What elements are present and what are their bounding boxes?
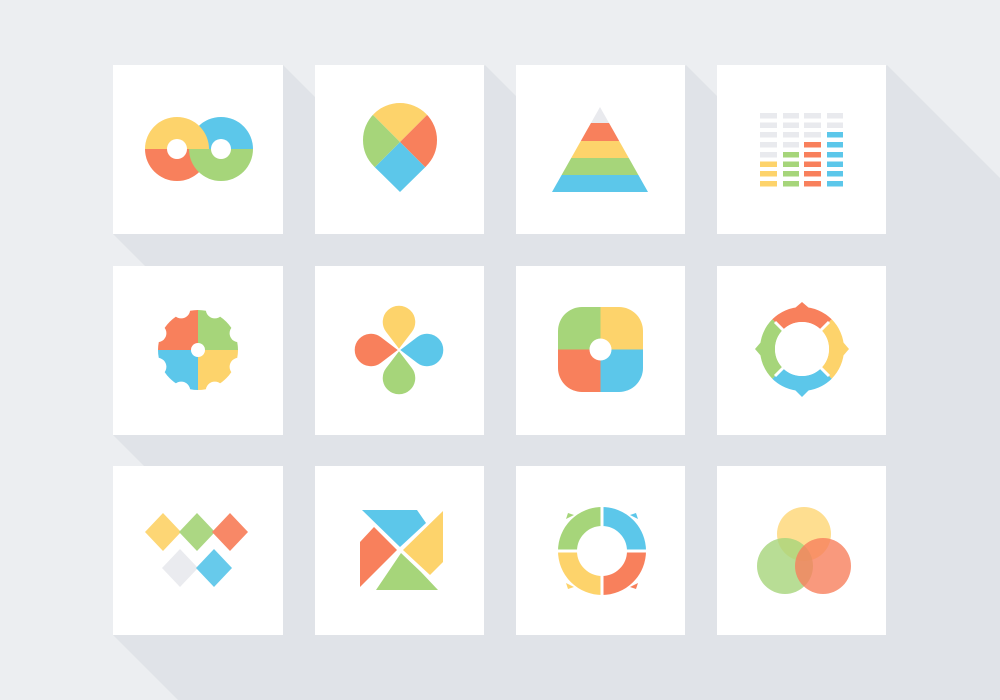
card: rounded square: [516, 266, 685, 435]
card: pinwheel: [315, 466, 484, 635]
card: flower: [315, 266, 484, 435]
card: bar chart: [717, 65, 886, 234]
card: infinity: [113, 65, 283, 234]
card: ring with arrows: [717, 266, 886, 435]
card: diamonds: [113, 466, 283, 635]
card: segmented ring: [516, 466, 685, 635]
card: map pin: [315, 65, 484, 234]
card: pyramid: [516, 65, 685, 234]
card: gear: [113, 266, 283, 435]
card: venn: [717, 466, 886, 635]
